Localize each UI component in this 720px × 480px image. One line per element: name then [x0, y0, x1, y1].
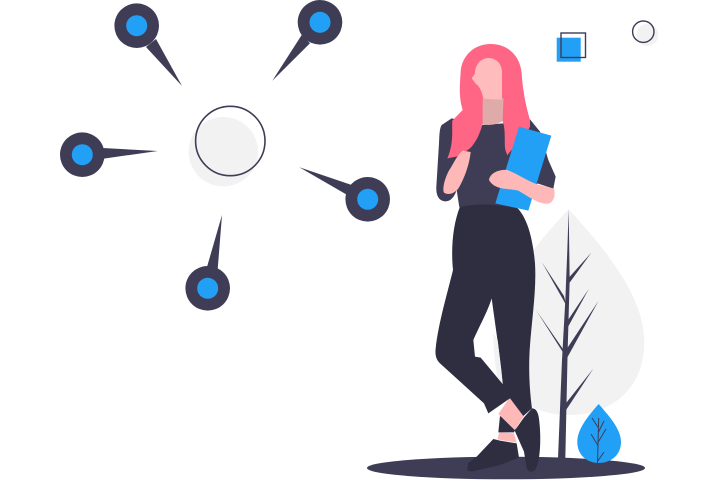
large plant [493, 209, 644, 458]
ankle strap [498, 416, 517, 432]
trousers [435, 203, 535, 416]
small leaf [577, 404, 621, 463]
upper body [436, 44, 556, 211]
left shoe [467, 439, 519, 472]
top [436, 118, 556, 208]
pin: top left [114, 3, 182, 86]
icon: overlapping squares [557, 33, 586, 62]
tree trunk and branches [536, 209, 599, 458]
icon: small circle [633, 21, 658, 46]
pin: left [60, 132, 158, 177]
left forearm [443, 151, 471, 194]
ground shadow [367, 457, 645, 479]
right forearm [489, 170, 555, 204]
pin: bottom [185, 215, 230, 311]
central circle [189, 106, 265, 186]
small stem [591, 418, 606, 463]
gap between legs [473, 298, 503, 384]
hair [447, 44, 530, 158]
pin: top right [272, 0, 342, 81]
upper ankle [498, 398, 524, 430]
lower body [435, 203, 540, 472]
large leaf [493, 209, 644, 415]
face [472, 58, 502, 99]
neck [482, 98, 503, 125]
woman [435, 44, 556, 472]
clipboard [495, 127, 551, 211]
small blue plant [577, 404, 621, 463]
pin: right [299, 167, 390, 222]
leaf behind gap [493, 333, 503, 384]
right shoe [515, 408, 540, 472]
lower ankle [497, 432, 517, 443]
